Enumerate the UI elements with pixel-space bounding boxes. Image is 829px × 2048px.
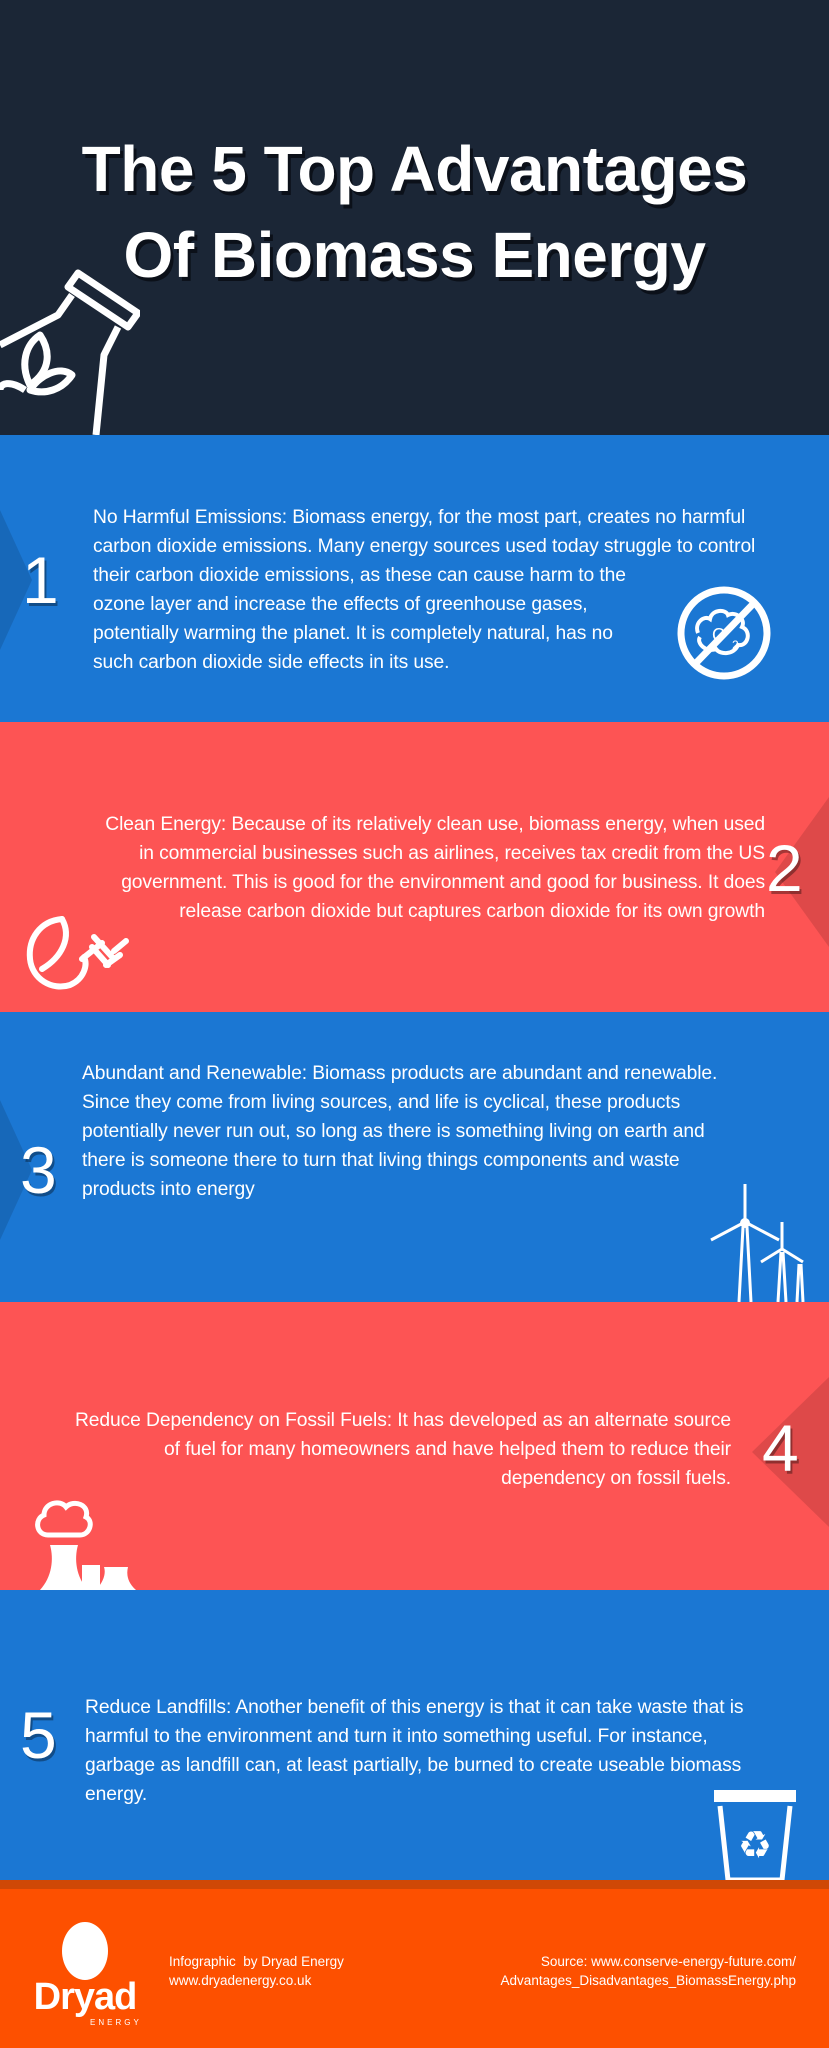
text 3: Abundant and Renewable: Biomass products are abundant and renewable. — [82, 1063, 717, 1084]
panel 3 — [0, 1012, 829, 1302]
icon: bottle — [0, 270, 140, 435]
icon: wind turbines — [710, 1184, 804, 1302]
panel 2 — [0, 722, 829, 1012]
logo — [34, 1922, 142, 2027]
number 5: 5 — [20, 1698, 57, 1772]
panel 4 — [0, 1302, 829, 1590]
text 4 — [75, 1410, 731, 1489]
text 2 — [105, 814, 765, 922]
text 1: their carbon dioxide emissions, as these can cause harm to the — [93, 565, 626, 586]
logo: Dryad — [34, 1976, 136, 2018]
text 1: No Harmful Emissions: Biomass energy, for the most part, creates no harmful — [93, 507, 745, 528]
icon: leaf plug — [26, 916, 129, 990]
text 4: dependency on fossil fuels. — [501, 1468, 731, 1489]
source: Source: www.conserve-energy-future.com/ — [541, 1954, 796, 1969]
footer — [0, 1880, 829, 2048]
title: The 5 Top Advantages — [82, 133, 747, 205]
number 3: 3 — [20, 1133, 57, 1207]
text 1 — [93, 507, 755, 673]
text 3: potentially never run out, so long as there is something living on earth and — [82, 1121, 705, 1142]
credit: www.dryadenergy.co.uk — [169, 1973, 311, 1988]
source — [500, 1954, 796, 1988]
text 1: ozone layer and increase the effects of greenhouse gases, — [93, 594, 588, 615]
text 3: Since they come from living sources, and life is cyclical, these products — [82, 1092, 680, 1113]
icon: factory — [35, 1500, 136, 1590]
text 5: Reduce Landfills: Another benefit of this energy is that it can take waste that is — [85, 1697, 743, 1718]
text 5: harmful to the environment and turn it into something useful. For instance, — [85, 1726, 708, 1747]
number 4: 4 — [762, 1411, 799, 1485]
text 3: products into energy — [82, 1179, 255, 1200]
text 2: release carbon dioxide but captures carbon dioxide for its own growth — [179, 901, 765, 922]
icon: recycle bin — [714, 1790, 796, 1880]
text 2: in commercial businesses such as airlines, receives tax credit from the US — [139, 843, 765, 864]
source: Advantages_Disadvantages_BiomassEnergy.php — [501, 1973, 796, 1988]
credit — [169, 1954, 344, 1988]
number 2: 2 — [766, 831, 803, 905]
text 4: of fuel for many homeowners and have helped them to reduce their — [164, 1439, 731, 1460]
text 2: government. This is good for the environment and good for business. It does — [121, 872, 765, 893]
text 4: Reduce Dependency on Fossil Fuels: It has developed as an alternate source — [75, 1410, 731, 1431]
icon: recycle bin: ♻ — [738, 1823, 772, 1867]
icon: no co2 — [678, 586, 770, 680]
text 2: Clean Energy: Because of its relatively clean use, biomass energy, when used — [105, 814, 765, 835]
text 1: potentially warming the planet. It is completely natural, has no — [93, 623, 613, 644]
title — [82, 133, 748, 294]
credit: Infographic by Dryad Energy — [169, 1954, 344, 1969]
text 1: such carbon dioxide side effects in its use. — [93, 652, 449, 673]
icon: no co2: 2 — [732, 638, 739, 652]
text 5 — [85, 1697, 743, 1805]
logo: ENERGY — [90, 2018, 142, 2027]
icon: no co2: C — [712, 625, 725, 645]
title: Of Biomass Energy — [124, 219, 705, 291]
text 3 — [82, 1063, 717, 1200]
text 5: energy. — [85, 1784, 147, 1805]
panel 1 — [0, 435, 829, 722]
header — [0, 0, 829, 435]
text 5: garbage as landfill can, at least partially, be burned to create useable biomass — [85, 1755, 741, 1776]
text 1: carbon dioxide emissions. Many energy sources used today struggle to control — [93, 536, 755, 557]
panel 5 — [0, 1590, 829, 1880]
number 1: 1 — [22, 543, 59, 617]
text 3: there is someone there to turn that living things components and waste — [82, 1150, 680, 1171]
